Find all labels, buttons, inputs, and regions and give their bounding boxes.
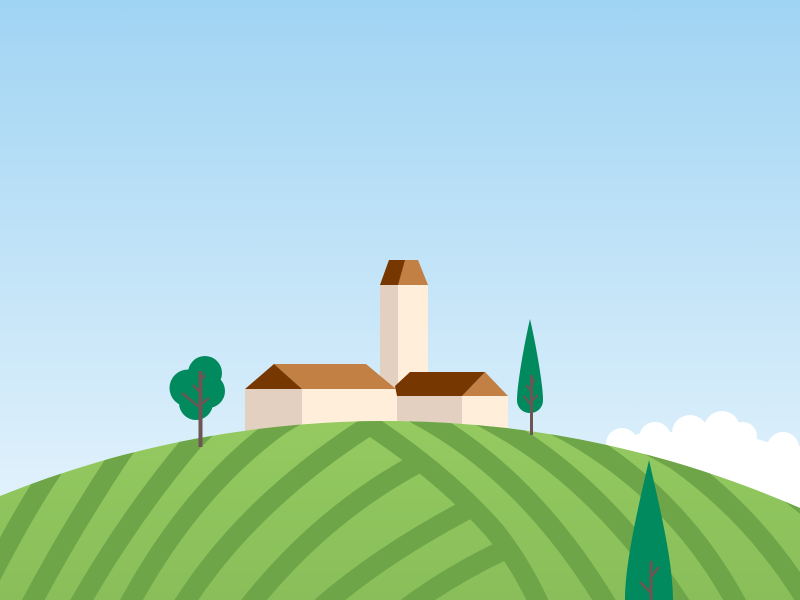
church tower — [380, 260, 428, 405]
small cypress tree — [517, 319, 543, 435]
right building — [395, 372, 508, 436]
field furrows — [0, 421, 800, 600]
cloud — [606, 411, 800, 520]
round tree — [170, 356, 225, 447]
left building — [245, 364, 397, 439]
large cypress tree — [625, 460, 673, 600]
hill — [0, 421, 800, 600]
